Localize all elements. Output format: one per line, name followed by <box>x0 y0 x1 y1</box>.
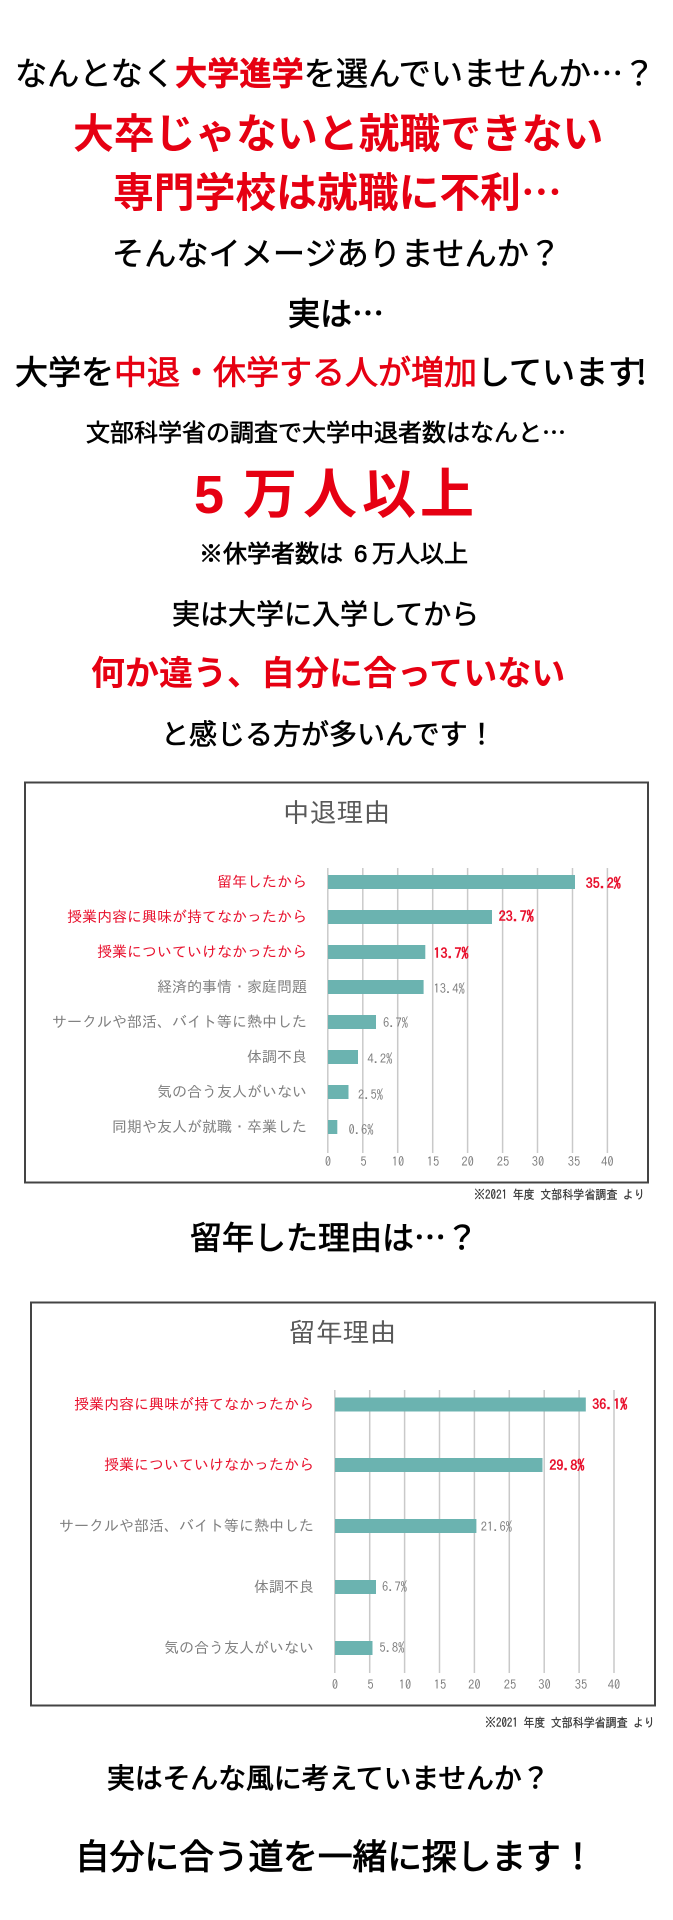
axis ticks: 35 <box>575 1678 587 1691</box>
value labels: 13.7% <box>434 945 470 960</box>
value labels: 6.7% <box>382 1580 407 1593</box>
heading: red statement 2: 専門学校は就職に不利… <box>113 160 562 219</box>
note: leave of absence count: 6 <box>354 541 367 568</box>
value labels: 0.6% <box>348 1123 374 1136</box>
value labels: 4.2% <box>367 1052 392 1065</box>
heading: reasons for repeating: 留年した理由は…？ <box>190 1213 478 1259</box>
category labels: 同期や友人が就職・卒業した <box>112 1119 307 1134</box>
heading: question line: なんとなく大学進学を選んでいませんか…？ <box>15 49 655 95</box>
axis ticks: 25 <box>497 1155 509 1168</box>
value labels: 36.1% <box>592 1396 628 1411</box>
value labels: 2.5% <box>358 1088 383 1101</box>
text: image question: そんなイメージありませんか？ <box>112 229 561 275</box>
text: do you think so: 実はそんな風に考えていませんか？ <box>107 1757 550 1797</box>
axis ticks: 10 <box>399 1678 411 1691</box>
closing headline: 自分に合う道を一緒に探します！ <box>75 1829 595 1879</box>
axis ticks: 5 <box>360 1155 367 1168</box>
bars <box>328 875 575 1134</box>
axis ticks: 10 <box>392 1155 404 1168</box>
big number: 5万人以上: 5 <box>194 465 229 525</box>
value labels: 23.7% <box>499 908 535 923</box>
value labels: 5.8% <box>379 1641 404 1654</box>
axis ticks: 25 <box>504 1678 516 1691</box>
chart title: 中退理由 <box>282 799 390 826</box>
value labels <box>348 875 622 1136</box>
category labels: 授業についていけなかったから <box>97 944 307 959</box>
value labels: 13.4% <box>434 982 465 995</box>
axis ticks: 40 <box>608 1678 620 1691</box>
axis ticks: 30 <box>532 1155 544 1168</box>
axis ticks: 40 <box>601 1155 614 1168</box>
category labels: 体調不良 <box>247 1049 307 1064</box>
value labels <box>379 1396 628 1654</box>
axis ticks: 15 <box>434 1678 446 1691</box>
category labels: サークルや部活、バイト等に熱中した <box>59 1518 314 1533</box>
axis ticks <box>325 1155 614 1168</box>
category labels <box>59 1396 314 1655</box>
text: after entering university: 実は大学に入学してから <box>172 593 479 633</box>
panel: dropout reasons chart <box>25 782 648 1182</box>
category labels: 授業内容に興味が持てなかったから <box>74 1396 314 1412</box>
chart title: 留年理由 <box>288 1319 396 1346</box>
text: survey intro: 文部科学省の調査で大学中退者数はなんと… <box>86 413 566 448</box>
heading: increase statement: 大学を中退・休学する人が増加しています <box>15 346 641 394</box>
axis ticks: 30 <box>538 1678 551 1691</box>
value labels: 6.7% <box>383 1016 408 1029</box>
axis ticks: 35 <box>568 1155 580 1168</box>
panel: repeat-year reasons chart <box>31 1302 655 1706</box>
category labels <box>52 874 307 1134</box>
category labels: 授業内容に興味が持てなかったから <box>67 909 307 924</box>
axis ticks: 20 <box>461 1155 474 1168</box>
note: leave of absence count: ※休学者数は <box>199 534 343 569</box>
category labels: サークルや部活、バイト等に熱中した <box>52 1014 307 1029</box>
heading: red statement 1: 大卒じゃないと就職できない <box>73 101 603 160</box>
note: leave of absence count: 万人以上 <box>372 534 468 569</box>
source note 2: ※2021 年度 文部科学省調査 より <box>485 1716 655 1729</box>
value labels: 21.6% <box>481 1520 512 1533</box>
text: actually: 実は… <box>288 289 384 335</box>
big number: 5万人以上: 万 <box>243 450 302 529</box>
text: many people feel: と感じる方が多いんです！ <box>161 713 496 753</box>
value labels: 29.8% <box>549 1457 585 1472</box>
axis ticks: 20 <box>468 1678 481 1691</box>
axis ticks <box>332 1678 620 1691</box>
heading: increase statement: ! <box>636 346 647 394</box>
category labels: 授業についていけなかったから <box>104 1457 314 1472</box>
category labels: 気の合う友人がいない <box>164 1640 314 1655</box>
big number: 5万人以上: 以 <box>362 450 420 529</box>
bars <box>335 1398 586 1655</box>
highlight: something is different: 何か違う、自分に合っていない <box>91 646 565 695</box>
axis ticks: 0 <box>332 1678 338 1691</box>
category labels: 気の合う友人がいない <box>157 1084 307 1099</box>
category labels: 経済的事情・家庭問題 <box>157 978 307 994</box>
value labels: 35.2% <box>586 875 622 890</box>
category labels: 体調不良 <box>254 1579 314 1594</box>
big number: 5万人以上: 人 <box>303 450 362 529</box>
axis ticks: 5 <box>367 1678 374 1691</box>
category labels: 留年したから <box>217 874 307 889</box>
big number: 5万人以上: 上 <box>420 450 478 529</box>
axis ticks: 0 <box>325 1155 331 1168</box>
source note 1: ※2021 年度 文部科学省調査 より <box>474 1188 645 1201</box>
axis ticks: 15 <box>427 1155 439 1168</box>
